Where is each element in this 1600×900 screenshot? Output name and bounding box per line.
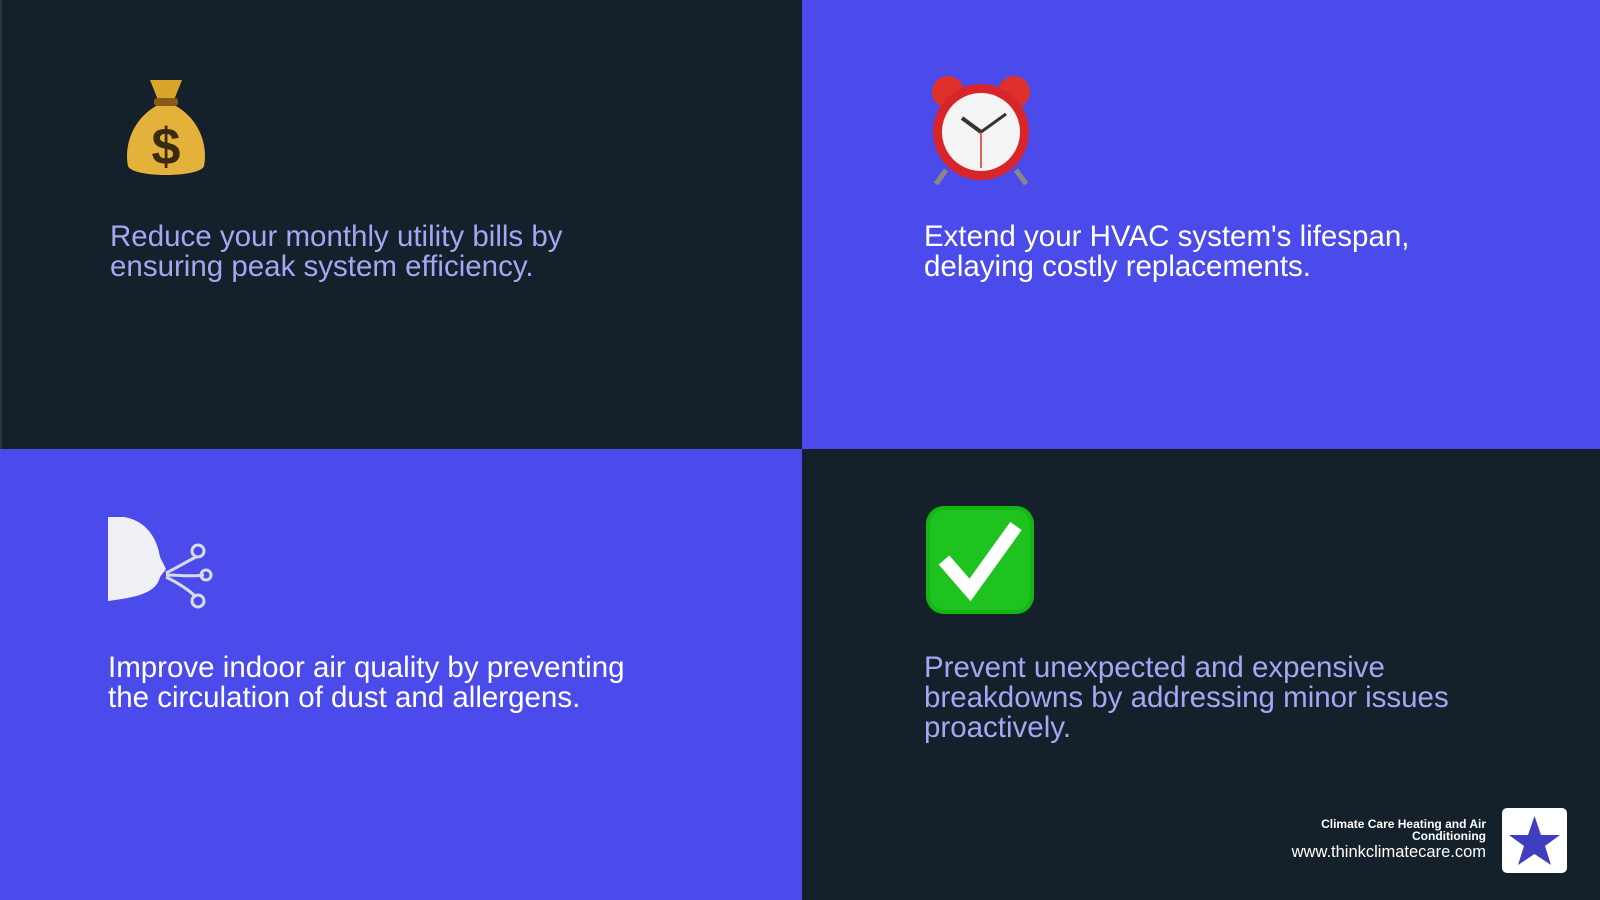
icon: check mark	[926, 506, 1034, 614]
text: air quality: Improve indoor air quality by preventing the circulation of dust and allergens.	[108, 651, 625, 714]
website: www.thinkclimatecare.com	[1292, 843, 1486, 861]
text: lifespan: Extend your HVAC system's lifespan, delaying costly replacements.	[924, 220, 1409, 283]
icon: money bag: $	[152, 118, 181, 176]
logo block	[1292, 808, 1567, 873]
panel: lifespan	[802, 0, 1600, 449]
panel: prevent breakdowns	[802, 449, 1600, 900]
text: prevent breakdowns: Prevent unexpected and expensive breakdowns by addressing minor issues proactively.	[924, 651, 1449, 744]
icon: star logo	[1502, 808, 1567, 873]
panel: air quality	[0, 449, 802, 900]
icon: money bag	[127, 80, 205, 176]
icon: alarm clock	[932, 76, 1030, 186]
text: reduce bills: Reduce your monthly utility bills by ensuring peak system efficiency.	[110, 220, 563, 283]
company name: Climate Care Heating and Air Conditioning	[1321, 817, 1486, 843]
panel: reduce bills	[0, 0, 802, 449]
icon: wind face	[108, 517, 212, 608]
